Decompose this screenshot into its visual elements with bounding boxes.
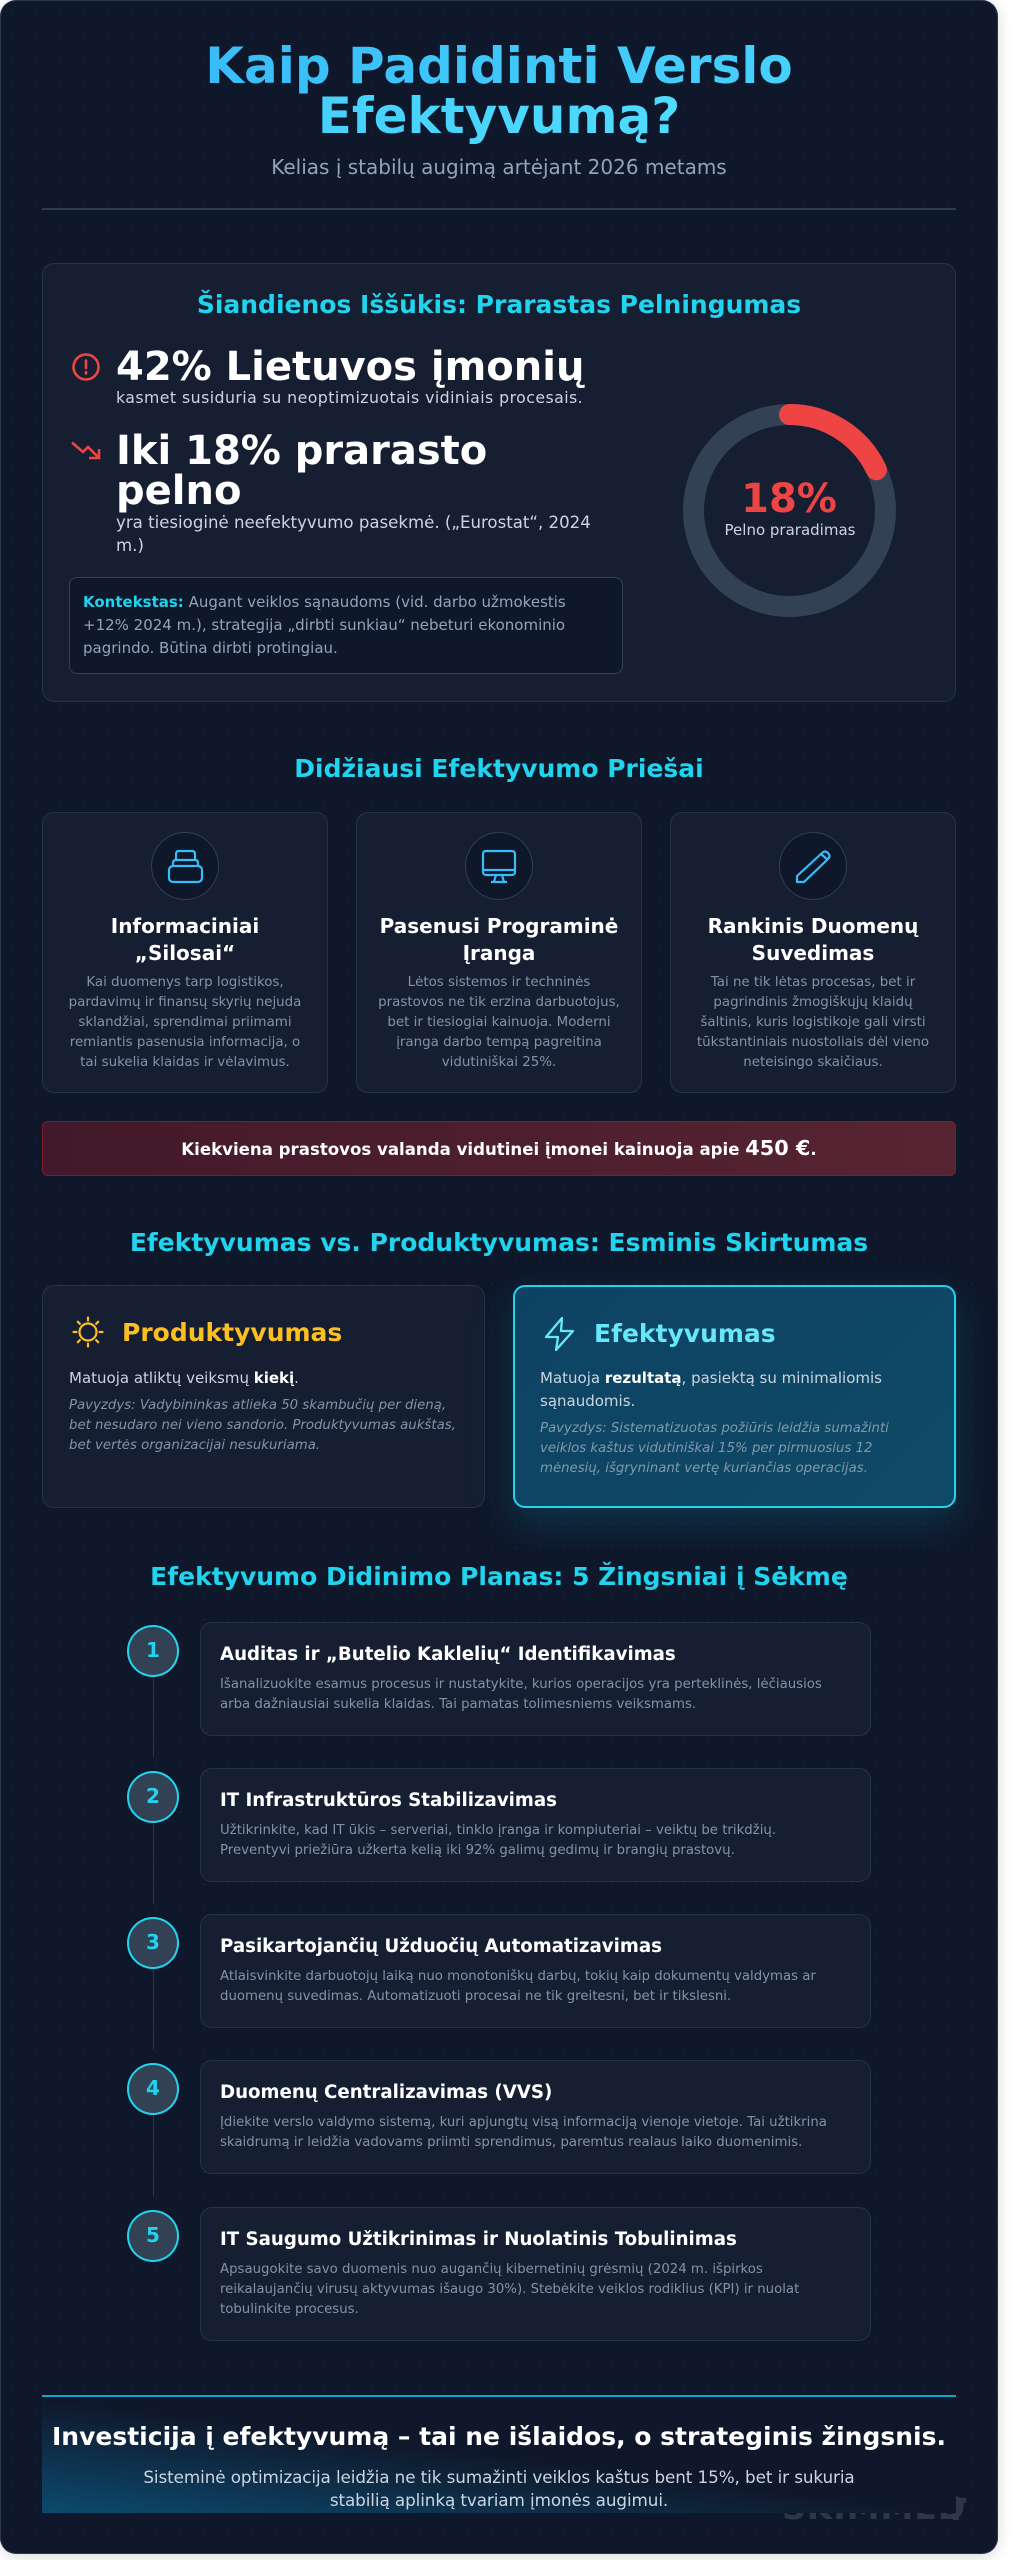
section heading: enemies: Didžiausi Efektyvumo Priešai xyxy=(294,754,704,783)
card text: Tai ne tik lėtas procesas, bet ir xyxy=(711,975,915,990)
card text: įranga darbo tempą pagreitina xyxy=(396,1035,602,1050)
efficiency example: mėnesių, išgryninant vertę kuriančias operacijas. xyxy=(540,1461,868,1476)
step 3 text: duomenų suvedimas. Automatizuoti procesai ne tik greitesni, bet ir tikslesni. xyxy=(220,1989,731,2004)
card title: Įranga xyxy=(463,941,535,965)
efficiency heading: Efektyvumas xyxy=(594,1319,776,1348)
card text xyxy=(378,975,620,1070)
card text: pardavimų ir finansų skyrių nejuda xyxy=(69,995,301,1010)
panel: productivity xyxy=(42,1285,485,1508)
title: Efektyvumą? xyxy=(318,87,680,145)
step 5 text: reikalaujančių virusų aktyvumas išaugo 30%). Stebėkite veiklos rodiklius (KPI) ir nuolat xyxy=(220,2282,799,2297)
step 3 number xyxy=(127,1917,179,1969)
step 3 number: 3 xyxy=(146,1930,160,1954)
step 2 title: IT Infrastruktūros Stabilizavimas xyxy=(220,1790,557,1811)
card text: Lėtos sistemos ir techninės xyxy=(408,975,590,990)
context box xyxy=(69,577,623,674)
donut value: 18% xyxy=(741,476,837,522)
productivity example: bet nesudaro nei vieno sandorio. Produktyvumas aukštas, xyxy=(69,1418,456,1433)
step 1 card xyxy=(200,1622,871,1736)
card text: prastovos ne tik erzina darbuotojus, xyxy=(378,995,620,1010)
card text xyxy=(69,975,301,1070)
stat 2 description: yra tiesioginė neefektyvumo pasekmė. („Eurostat“, 2024 xyxy=(116,512,591,532)
card title: Pasenusi Programinė xyxy=(380,914,618,938)
card text: tai sukelia klaidas ir vėlavimus. xyxy=(80,1055,290,1070)
step 2 number: 2 xyxy=(146,1784,160,1808)
step 5 text: Apsaugokite savo duomenis nuo augančių kibernetinių grėsmių (2024 m. išpirkos xyxy=(220,2262,763,2277)
card text: bet ir tiesiogiai kainuoja. Moderni xyxy=(387,1015,611,1030)
footer text xyxy=(143,2467,855,2510)
step 3 card xyxy=(200,1914,871,2028)
panel: efficiency xyxy=(513,1285,956,1508)
callout text: Kiekviena prastovos valanda vidutinei įmonei kainuoja apie 450 €. xyxy=(181,1136,817,1160)
context text xyxy=(83,592,566,656)
card text: Kai duomenys tarp logistikos, xyxy=(86,975,284,990)
icon: alert circle xyxy=(72,353,100,381)
icon: lightning bolt xyxy=(544,1316,574,1352)
footer text: Sisteminė optimizacija leidžia ne tik sumažinti veiklos kaštus bent 15%, bet ir sukuria xyxy=(143,2467,855,2487)
step 3 text: Atlaisvinkite darbuotojų laiką nuo monotoniškų darbų, tokių kaip dokumentų valdymas ar xyxy=(220,1969,816,1984)
step 5 number: 5 xyxy=(146,2223,160,2247)
step 2 text xyxy=(220,1823,776,1858)
step 1 number: 1 xyxy=(146,1638,160,1662)
icon: trend down xyxy=(71,442,100,460)
stat: 18 percent: pelno xyxy=(116,468,241,514)
card title xyxy=(380,914,618,965)
stat: 18 percent: Iki 18% prarasto xyxy=(116,428,487,474)
icon: monitor xyxy=(465,832,533,900)
step 4 title: Duomenų Centralizavimas (VVS) xyxy=(220,2082,552,2103)
step 1 text: Išanalizuokite esamus procesus ir nustatykite, kurios operacijos yra perteklinės, lėčiausios xyxy=(220,1677,822,1692)
panel: information silos xyxy=(42,812,328,1093)
step 5 title: IT Saugumo Užtikrinimas ir Nuolatinis Tobulinimas xyxy=(220,2229,737,2250)
efficiency definition xyxy=(540,1369,882,1410)
productivity definition: Matuoja atliktų veiksmų kiekį. xyxy=(69,1369,299,1387)
stat: 18 percent xyxy=(116,428,487,514)
section heading: plan: Efektyvumo Didinimo Planas: 5 Žingsniai į Sėkmę xyxy=(150,1562,848,1591)
step 4 text: Įdiekite verslo valdymo sistemą, kuri apjungtų visą informaciją vienoje vietoje. Tai užtikrina xyxy=(220,2115,827,2130)
card text: tūkstantiniais nuostoliais dėl vieno xyxy=(697,1035,929,1050)
watermark mark xyxy=(953,2498,966,2520)
step 5 card xyxy=(200,2207,871,2341)
card text: vidutiniškai 25%. xyxy=(442,1055,556,1070)
step 5 number xyxy=(127,2210,179,2262)
productivity heading: Produktyvumas xyxy=(122,1318,342,1347)
step 2 text: Užtikrinkite, kad IT ūkis – serveriai, tinklo įranga ir kompiuteriai – veiktų be trikdžių. xyxy=(220,1823,776,1838)
step 1 title: Auditas ir „Butelio Kaklelių“ Identifikavimas xyxy=(220,1644,676,1665)
card text xyxy=(697,975,929,1070)
step 4 number: 4 xyxy=(146,2076,160,2100)
stat 1 description: kasmet susiduria su neoptimizuotais vidiniais procesais. xyxy=(116,388,583,407)
callout: downtime cost xyxy=(42,1121,956,1176)
title: Kaip Padidinti Verslo xyxy=(205,37,793,95)
step 1 text: arba dažniausiai sukelia klaidas. Tai pamatas tolimesniems veiksmams. xyxy=(220,1697,696,1712)
panel: today's challenge xyxy=(42,263,956,702)
challenge heading: Šiandienos Iššūkis: Prarastas Pelningumas xyxy=(197,290,801,319)
step 2 card xyxy=(200,1768,871,1882)
efficiency example: Pavyzdys: Sistematizuotas požiūris leidžia sumažinti xyxy=(540,1421,889,1436)
card text: pagrindinis žmogiškųjų klaidų xyxy=(713,995,913,1010)
step 3 title: Pasikartojančių Užduočių Automatizavimas xyxy=(220,1936,662,1957)
card title: Rankinis Duomenų xyxy=(708,914,918,938)
title xyxy=(205,37,793,145)
step 3 text xyxy=(220,1969,816,2004)
donut chart: 18 percent profit loss xyxy=(683,404,896,617)
card text: neteisingo skaičiaus. xyxy=(743,1055,883,1070)
card title xyxy=(708,914,918,965)
card text: šaltinis, kuris logistikoje gali virsti xyxy=(700,1015,926,1030)
stat 2 description: m.) xyxy=(116,536,144,554)
step 2 number xyxy=(127,1771,179,1823)
efficiency example: veiklos kaštus vidutiniškai 15% per pirmuosius 12 xyxy=(540,1441,872,1456)
donut caption: Pelno praradimas xyxy=(725,521,855,539)
footer heading: Investicija į efektyvumą – tai ne išlaidos, o strateginis žingsnis. xyxy=(52,2422,946,2451)
step 5 text: tobulinkite procesus. xyxy=(220,2302,359,2317)
efficiency definition: sąnaudomis. xyxy=(540,1392,635,1410)
footer callout xyxy=(42,2395,956,2513)
productivity example: bet vertės organizacijai nesukuriama. xyxy=(69,1438,320,1453)
footer text: stabilią aplinką tvariam įmonės augimui. xyxy=(330,2490,668,2510)
subtitle: Kelias į stabilų augimą artėjant 2026 metams xyxy=(271,155,727,179)
watermark: SKIMMED xyxy=(782,2488,966,2527)
context text: pagrindo. Būtina dirbti protingiau. xyxy=(83,638,338,656)
context text: +12% 2024 m.), strategija „dirbti sunkiau“ nebeturi ekonominio xyxy=(83,616,565,634)
context text: Kontekstas: Augant veiklos sąnaudoms (vid. darbo užmokestis xyxy=(83,592,566,610)
efficiency definition: Matuoja rezultatą, pasiektą su minimaliomis xyxy=(540,1369,882,1387)
step 4 card xyxy=(200,2060,871,2174)
card text: sklandžiai, sprendimai priimami xyxy=(78,1015,292,1030)
card title: „Silosai“ xyxy=(135,941,235,965)
panel: manual data entry xyxy=(670,812,956,1093)
card title: Informaciniai xyxy=(111,914,259,938)
card title xyxy=(111,914,259,965)
step 4 number xyxy=(127,2063,179,2115)
step 4 text: skaidrumą ir leidžia vadovams priimti sprendimus, paremtus realaus laiko duomenimis. xyxy=(220,2135,802,2150)
step 1 text xyxy=(220,1677,822,1712)
card title: Suvedimas xyxy=(752,941,874,965)
step 4 text xyxy=(220,2115,827,2150)
productivity example: Pavyzdys: Vadybininkas atlieka 50 skambučių per dieną, xyxy=(69,1398,446,1413)
stat: 42 percent: 42% Lietuvos įmonių xyxy=(116,344,584,390)
card text: remiantis pasenusia informacija, o xyxy=(70,1035,300,1050)
icon: layered silos xyxy=(151,832,219,900)
icon: sun xyxy=(72,1316,104,1348)
step 2 text: Preventyvi priežiūra užkerta kelią iki 92% galimų gedimų ir brangių prastovų. xyxy=(220,1843,735,1858)
step 5 text xyxy=(220,2262,799,2317)
productivity example xyxy=(69,1398,456,1453)
icon: pencil xyxy=(779,832,847,900)
panel: outdated software xyxy=(356,812,642,1093)
efficiency example xyxy=(540,1421,889,1476)
section heading: efficiency vs productivity: Efektyvumas vs. Produktyvumas: Esminis Skirtumas xyxy=(130,1228,868,1257)
stat 2 description xyxy=(116,512,591,554)
step 1 number xyxy=(127,1625,179,1677)
